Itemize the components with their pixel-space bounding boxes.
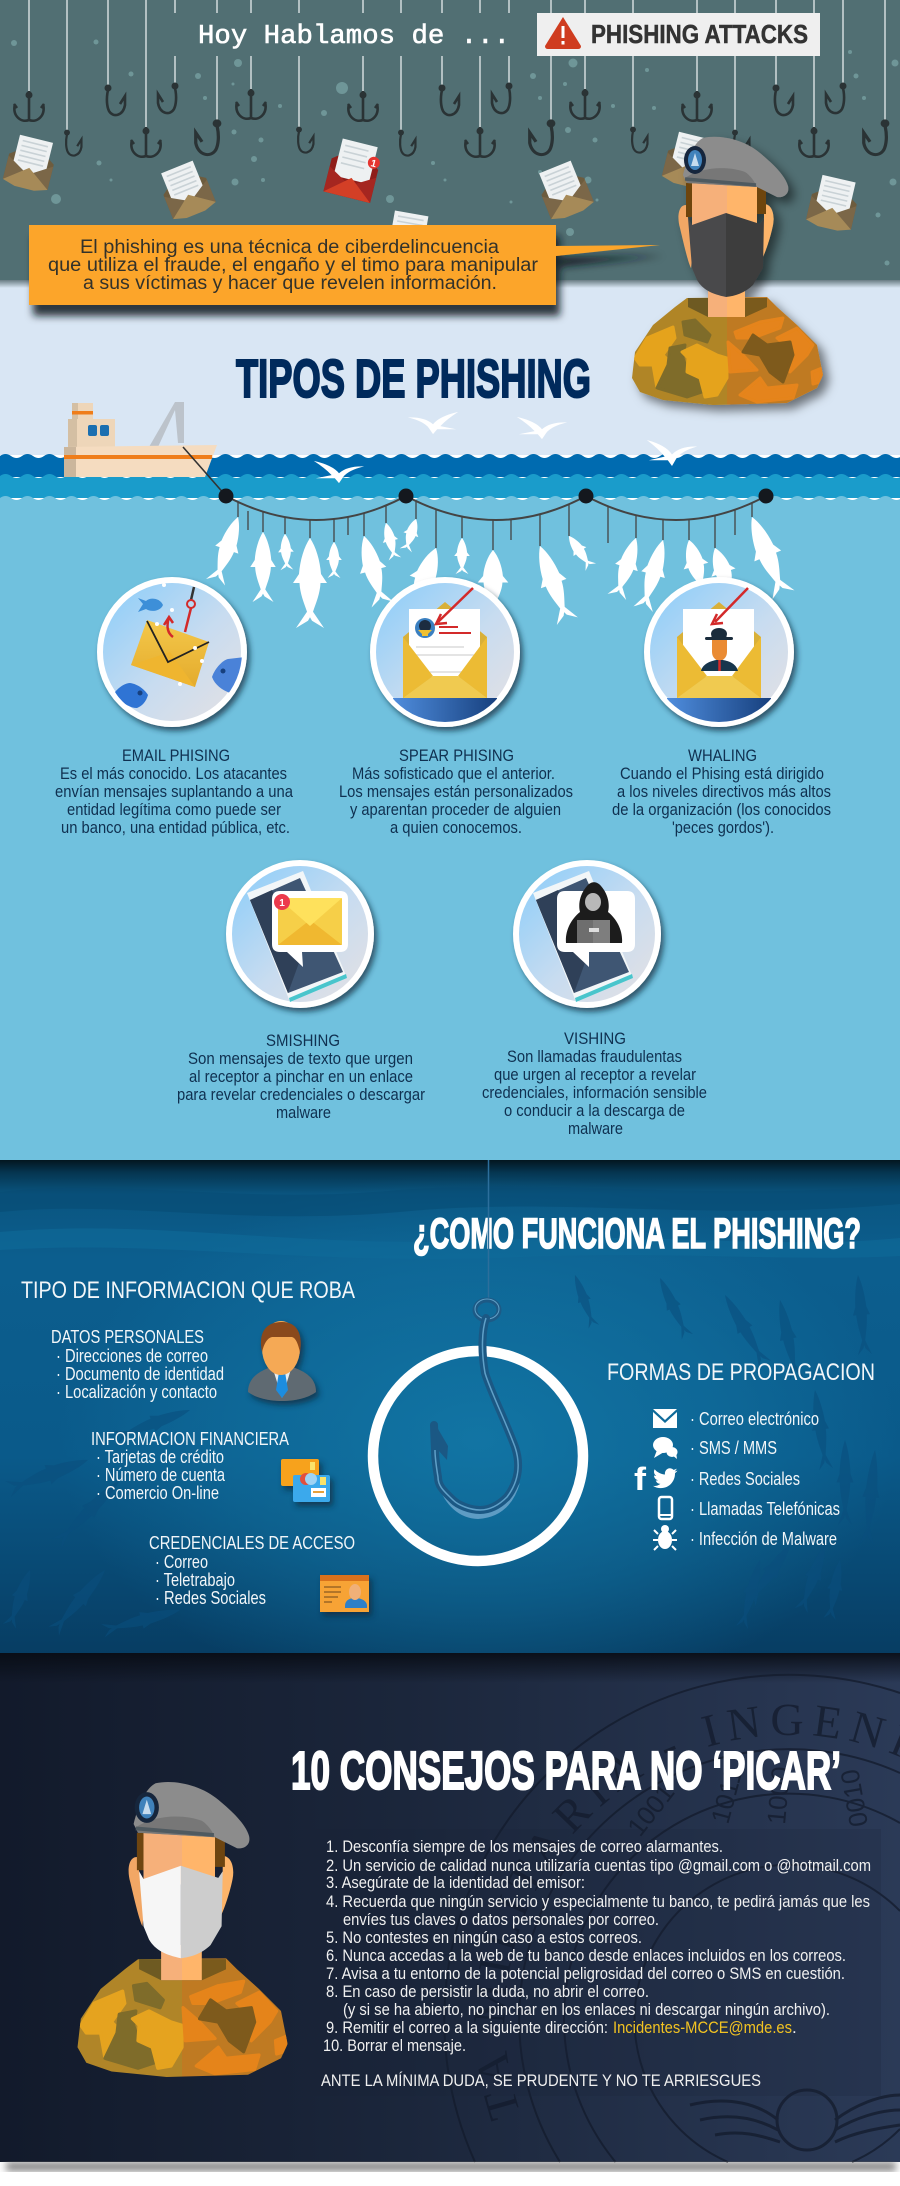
text: credenciales de acceso: · Correo (155, 1552, 208, 1572)
text: credenciales de acceso (149, 1533, 355, 1608)
emblem seal: 1000 (761, 1765, 796, 1826)
heading: tipos de phishing: TIPOS DE PHISHING (236, 349, 591, 409)
fishing boat (64, 402, 217, 477)
text: datos personales: · Direcciones de correo (56, 1346, 208, 1366)
text: credenciales de acceso: CREDENCIALES DE ACCESO (149, 1533, 355, 1553)
emblem seal: 1011 (705, 1765, 748, 1827)
text: email phising (55, 746, 293, 837)
panel: list of tips: ANTE LA MÍNIMA DUDA, SE PRUDENTE Y NO TE ARRIESGUES (321, 2071, 761, 2090)
badge: phishing attacks: PHISHING ATTACKS (591, 19, 808, 49)
text: smishing: al receptor a pinchar en un enlace (189, 1067, 413, 1086)
list: formas de propagacion: · Infección de Malware (690, 1529, 837, 1549)
icon: smishing: 1 (279, 898, 285, 909)
text: spear phising: a quien conocemos. (390, 818, 522, 837)
panel: list of tips: 8. En caso de persistir la duda, no abrir el correo. (326, 1982, 649, 2001)
icon: smishing (229, 863, 371, 1005)
icon: mail (653, 1409, 677, 1428)
panel: list of tips: envíes tus claves o datos personales por correo. (343, 1910, 659, 1929)
icon: credit cards (281, 1459, 330, 1502)
badge: phishing attacks (537, 13, 820, 56)
list: formas de propagacion: · Correo electrónico (690, 1409, 819, 1429)
icon: whaling (647, 580, 791, 728)
panel: hooks header background (0, 0, 900, 455)
seagulls (314, 412, 697, 483)
text: informacion financiera: INFORMACION FINANCIERA (91, 1429, 289, 1449)
icon: person in suit (248, 1321, 316, 1401)
text: datos personales: · Documento de identidad (56, 1364, 224, 1384)
icon: id card (320, 1575, 369, 1612)
text: whaling: a los niveles directivos más altos (617, 782, 831, 801)
panel: list of tips: 3. Asegúrate de la identidad del emisor: (326, 1873, 585, 1892)
ring and fishing hook (373, 1160, 583, 1561)
text: smishing (177, 1031, 425, 1122)
text: email phising: EMAIL PHISING (122, 746, 230, 765)
text: credenciales de acceso: · Redes Sociales (155, 1588, 266, 1608)
text: whaling: Cuando el Phising está dirigido (620, 764, 824, 783)
panel: list of tips: (y si se ha abierto, no pinchar en los enlaces ni descargar ningún archivo). (343, 2000, 830, 2019)
text: credenciales de acceso: · Teletrabajo (155, 1570, 235, 1590)
heading: tipo de informacion que roba: TIPO DE INFORMACION QUE ROBA (21, 1277, 355, 1304)
text: spear phising: SPEAR PHISING (399, 746, 514, 765)
title strip: Hoy Hablamos de (165, 13, 537, 56)
panel: list of tips: Incidentes-MCCE@mde.es (613, 2018, 792, 2037)
text: informacion financiera: · Tarjetas de crédito (96, 1447, 224, 1467)
text: datos personales: DATOS PERSONALES (51, 1327, 204, 1347)
text: email phising: Es el más conocido. Los atacantes (60, 764, 287, 783)
emblem seal: 1001 (621, 1778, 680, 1842)
callout: definition of phishing: que utiliza el fraude, el engaño y el timo para manipular (48, 255, 539, 276)
panel: list of tips: 10. Borrar el mensaje. (323, 2036, 466, 2055)
text: whaling: WHALING (688, 746, 757, 765)
text: vishing (482, 1029, 707, 1138)
list: formas de propagacion (690, 1409, 840, 1549)
hanging fishing hooks (14, 0, 889, 157)
text: datos personales (51, 1327, 224, 1402)
text: email phising: entidad legítima como puede ser (67, 800, 281, 819)
fishing net with floats (183, 447, 774, 550)
panel: list of tips: 1. Desconfía siempre de los mensajes de correo alarmantes. (326, 1837, 723, 1856)
list: formas de propagacion: · SMS / MMS (690, 1438, 777, 1458)
text: datos personales: · Localización y contacto (56, 1382, 217, 1402)
text: email phising: un banco, una entidad pública, etc. (61, 818, 290, 837)
text: vishing: que urgen al receptor a revelar (494, 1065, 696, 1084)
icon: vishing (516, 863, 658, 1005)
text: whaling (612, 746, 831, 837)
text: spear phising: Más sofisticado que el anterior. (352, 764, 555, 783)
panel: sea with types of phishing (0, 452, 900, 1161)
text: informacion financiera: · Comercio On-line (96, 1483, 219, 1503)
text: spear phising: y aparentan proceder de alguien (350, 800, 561, 819)
emblem seal: 0010 (834, 1767, 874, 1829)
panel: list of tips: . (792, 2018, 797, 2037)
list: formas de propagacion: · Llamadas Telefónicas (690, 1499, 840, 1519)
icon: facebook and twitter (634, 1461, 677, 1497)
icon: chat bubbles (653, 1437, 678, 1459)
text: informacion financiera: · Número de cuenta (96, 1465, 226, 1485)
text: spear phising: Los mensajes están personalizados (339, 782, 573, 801)
text: smishing: para revelar credenciales o descargar (177, 1085, 425, 1104)
text: email phising: envían mensajes suplantando a una (55, 782, 293, 801)
text: vishing: Son llamadas fraudulentas (507, 1047, 682, 1066)
text: whaling: 'peces gordos'). (672, 818, 774, 837)
panel: list of tips (310, 1829, 881, 2096)
icon: spear phishing (373, 580, 517, 728)
text: vishing: o conducir a la descarga de (504, 1101, 685, 1120)
icon: phone (659, 1497, 672, 1519)
falling envelopes (2, 130, 861, 268)
text: vishing: VISHING (564, 1029, 626, 1048)
list: formas de propagacion: · Redes Sociales (690, 1469, 800, 1489)
text: spear phising (339, 746, 573, 837)
title strip: Hoy Hablamos de: Hoy Hablamos de ... (198, 22, 510, 52)
caught fish (204, 512, 797, 628)
callout: definition of phishing: a sus víctimas y hacer que revelen información. (83, 273, 497, 294)
text: whaling: de la organización (los conocidos (612, 800, 831, 819)
text: smishing: Son mensajes de texto que urgen (188, 1049, 413, 1068)
icon: facebook and twitter: f (634, 1461, 646, 1497)
panel: list of tips: 5. No contestes en ningún caso a estos correos. (326, 1928, 642, 1947)
text: smishing: SMISHING (266, 1031, 340, 1050)
text: informacion financiera (91, 1429, 289, 1503)
text: smishing: malware (276, 1103, 331, 1122)
panel: list of tips: 9. Remitir el correo a la siguiente dirección: (326, 2018, 608, 2037)
figure: soldier with dark mask (625, 137, 829, 410)
text: vishing: credenciales, información sensible (482, 1083, 707, 1102)
callout: definition of phishing (29, 225, 660, 305)
callout: definition of phishing: El phishing es una técnica de ciberdelincuencia (80, 237, 499, 258)
panel: como funciona background (0, 1160, 900, 1710)
text: vishing: malware (568, 1119, 623, 1138)
figure: soldier with white mask (70, 1782, 294, 2082)
bottom shadow (6, 2162, 896, 2171)
panel: consejos background (0, 1653, 900, 2162)
icon: bug (653, 1525, 677, 1550)
falling envelopes: 1 (369, 158, 378, 170)
icon: email phishing (100, 580, 245, 724)
